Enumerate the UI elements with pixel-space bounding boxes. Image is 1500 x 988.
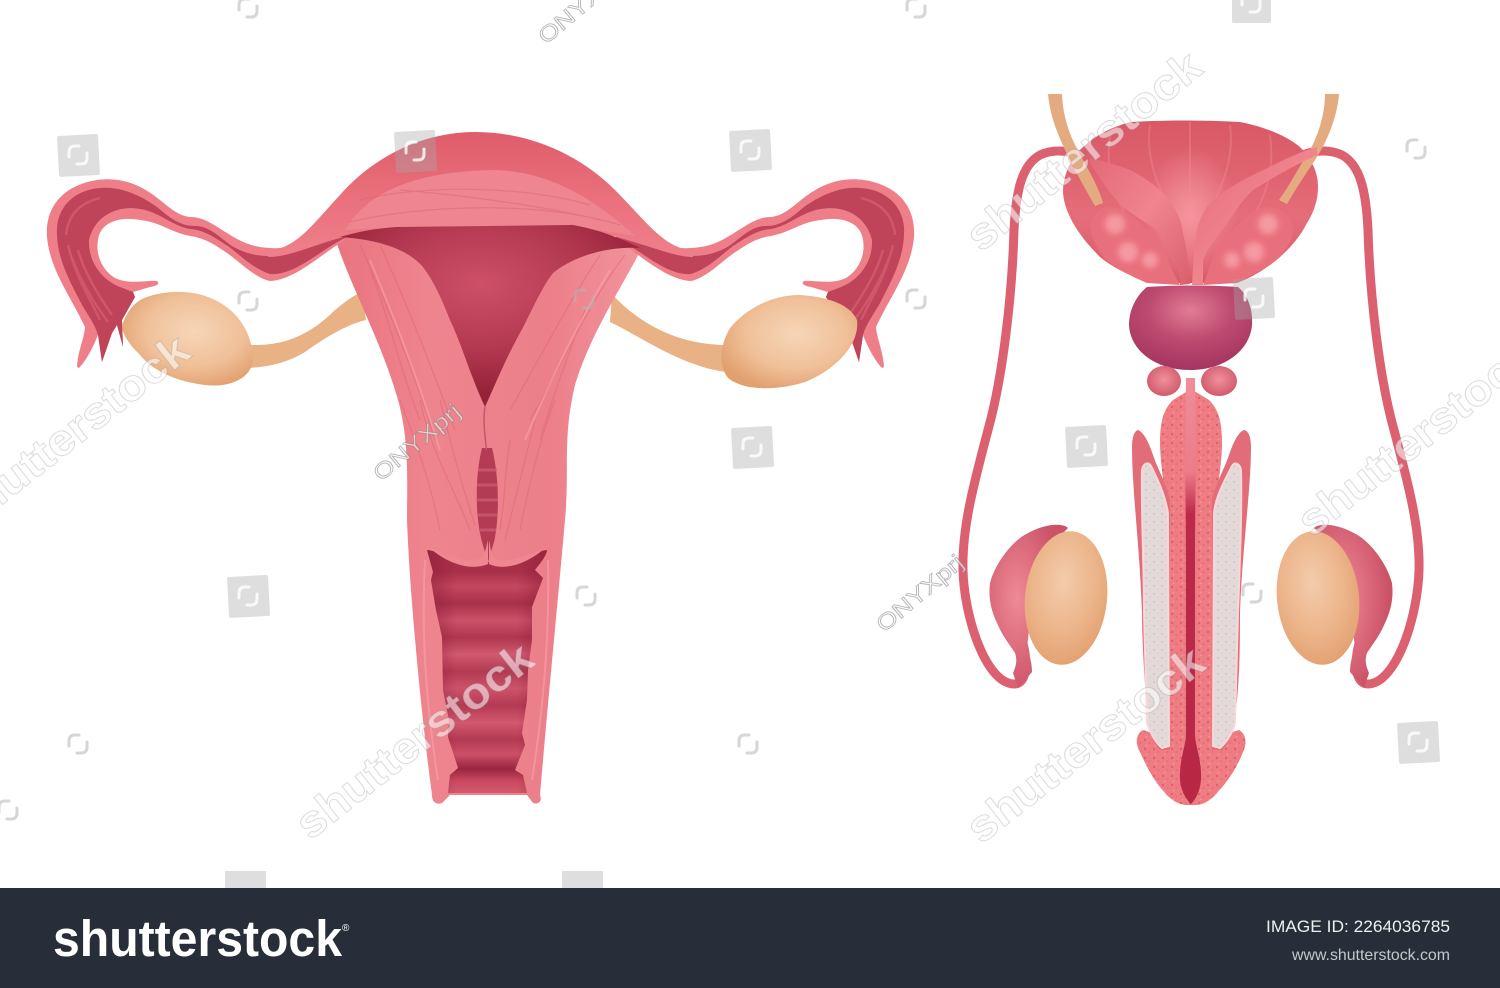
cervix lips (430, 540, 545, 567)
fundus muscle band (345, 170, 635, 236)
watermark text 4: shutterstock (957, 637, 1215, 853)
left ovary (122, 292, 253, 386)
watermark icon glyphs in tiles (69, 0, 1427, 751)
right testis (1270, 527, 1366, 669)
watermark outline icons (0, 0, 1425, 819)
right ovary (721, 295, 857, 388)
left testis (1018, 527, 1114, 669)
cervical canal (477, 448, 498, 562)
cervix split line (484, 407, 486, 450)
website: www.shutterstock.com (1291, 947, 1450, 964)
muscle fibres (350, 189, 625, 540)
right erectile tissue (1213, 463, 1241, 748)
right epididymis (1314, 525, 1393, 688)
contributor text 3: ONYXprj (871, 550, 968, 637)
left ampulla (1090, 158, 1190, 285)
left bulbourethral gland (1147, 366, 1181, 396)
right vas deferens (1287, 151, 1419, 684)
image id: IMAGE ID: 2264036785 (1266, 917, 1450, 936)
left vas deferens (963, 151, 1095, 684)
contributor text 1: ONYXprj (368, 399, 465, 486)
urethra (1180, 378, 1201, 804)
cervical ridges (477, 470, 498, 530)
left epididymis (989, 525, 1068, 688)
registered mark: ® (342, 923, 350, 934)
left erectile tissue (1142, 463, 1169, 748)
right ureter (1279, 94, 1339, 204)
left fallopian tube (47, 179, 345, 368)
bladder highlight (1130, 110, 1250, 280)
female reproductive system (47, 132, 914, 804)
left seminal vesicle (1090, 207, 1180, 285)
right ampulla (1192, 147, 1317, 285)
seminal vesicle highlights (1105, 214, 1278, 268)
prostate (1129, 286, 1252, 370)
watermark text 3: shutterstock (956, 41, 1212, 261)
right ovarian ligament (610, 294, 726, 372)
left ovarian ligament (240, 292, 366, 368)
footer bar (0, 888, 1500, 988)
male reproductive system (963, 94, 1419, 805)
corpus spongiosum and glans (1137, 392, 1246, 805)
uterus and vagina body (335, 225, 642, 804)
left ureter (1048, 94, 1103, 206)
contributor watermark (368, 0, 968, 637)
fundus of uterus (268, 132, 693, 257)
watermark text 2: shutterstock (286, 633, 544, 849)
right corpus cavernosum sheath (1212, 430, 1251, 750)
right seminal vesicle (1203, 207, 1293, 285)
uterine cavity (340, 225, 640, 407)
footer logo: shutterstock (53, 910, 343, 967)
right fallopian tube (616, 179, 914, 368)
vaginal canal (427, 550, 547, 793)
bladder fibres (1109, 122, 1271, 220)
right bulbourethral gland (1201, 366, 1237, 396)
left corpus cavernosum sheath (1132, 430, 1170, 750)
bladder (1063, 120, 1318, 283)
vaginal shading (427, 550, 547, 793)
